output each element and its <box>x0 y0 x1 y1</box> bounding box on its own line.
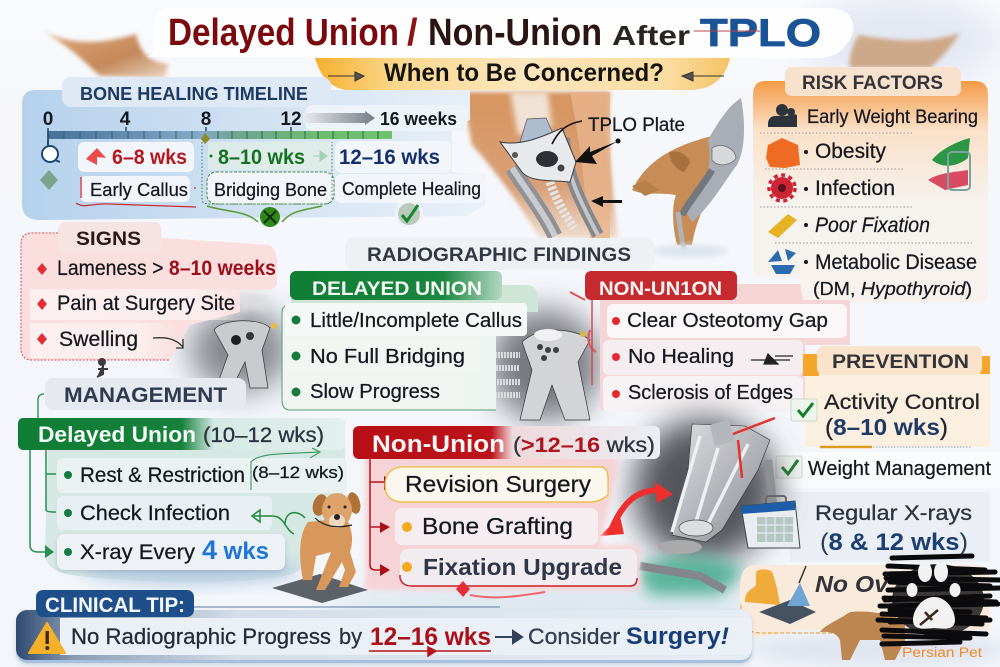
icon: toy figure <box>745 569 780 605</box>
white labels <box>78 141 485 204</box>
title words: Delayed Union <box>168 12 399 54</box>
delayed head text: Delayed Union <box>38 422 196 447</box>
panel: clinical tip: 12–16 wks <box>370 623 491 651</box>
items: Clear Osteotomy Gap <box>627 309 828 332</box>
icon: loupe <box>42 140 60 162</box>
signs heading: SIGNS <box>76 229 141 250</box>
panel: clinical tip <box>16 590 752 663</box>
check activity <box>791 399 817 421</box>
panel: signs: Swelling <box>59 328 138 351</box>
icon: small walking dog <box>820 612 905 660</box>
icon: poor fixation <box>768 214 797 238</box>
panel: clinical tip: Surgery! <box>626 623 729 650</box>
panel: delayed union findings: Slow Progress <box>310 380 440 403</box>
title banner <box>146 8 853 58</box>
title banner: TPLO <box>700 12 821 55</box>
scale numbers <box>43 109 302 130</box>
panel: bone healing timeline: 8–10 wks <box>218 146 305 169</box>
green highlight under 8-10 <box>208 142 332 170</box>
non-union heading: NON-UN1ON <box>599 278 722 300</box>
panel: delayed union findings: No Full Bridging <box>310 345 465 368</box>
panel: non-union findings: No Healing <box>628 345 734 368</box>
green bracket with icon <box>207 206 322 227</box>
timeline heading: BONE HEALING TIMELINE <box>80 84 308 104</box>
icon: calendar briefcase <box>741 496 800 548</box>
x-ray schedule panel: (8 & 12 wks ) <box>820 529 968 556</box>
stage names: Early Callus <box>90 179 188 200</box>
bullets <box>292 316 300 396</box>
panel: non-union management <box>353 426 660 597</box>
panel: no overload beige <box>740 565 990 640</box>
white strip behind 16 weeks <box>305 105 467 131</box>
scribbled watermark paw <box>878 556 1000 644</box>
row: rest: (8–12 wks) <box>252 463 344 482</box>
arrow from dog <box>252 510 305 534</box>
small arrow <box>751 354 793 364</box>
icon: red arrow <box>86 148 106 165</box>
scale numbers: 12 <box>280 109 302 130</box>
icon: weight bearing <box>768 104 797 127</box>
panel: prevention: (8–10 wks ) <box>825 414 948 440</box>
panel: delayed union management <box>18 418 347 584</box>
activity control: Activity Control <box>824 391 980 414</box>
scale numbers: 0 <box>43 109 53 130</box>
pin marker <box>97 358 108 377</box>
row: fixation: Fixation Upgrade <box>423 554 622 580</box>
subtitle text: When to Be Concerned? <box>384 59 664 87</box>
arrow <box>495 631 522 643</box>
green dot and small arrow <box>210 151 327 161</box>
risk heading: RISK FACTORS <box>802 73 943 94</box>
bullet markers <box>37 263 47 345</box>
signs items: Lameness > 8–10 weeks <box>57 257 276 280</box>
ribbon arrows <box>328 72 364 81</box>
row backgrounds <box>30 289 250 320</box>
arrow to plate <box>575 141 618 164</box>
panel: risk factors: Obesity <box>815 140 886 163</box>
title banner: Non-Union <box>428 12 602 54</box>
rows <box>607 304 847 338</box>
16 weeks label: 16 weeks <box>380 109 457 129</box>
red underline arrow <box>369 647 491 656</box>
radiographic findings heading: RADIOGRAPHIC FINDINGS <box>367 245 631 266</box>
row: infection <box>57 496 272 530</box>
row: revision: Revision Surgery <box>405 471 592 497</box>
x-ray schedule panel: Regular X-rays <box>815 502 972 525</box>
row: xray <box>57 534 285 570</box>
progress bar <box>48 127 392 144</box>
panel: management bg <box>38 378 246 418</box>
scale numbers: 8 <box>201 109 211 130</box>
weight management row <box>775 452 1000 488</box>
x-ray schedule panel <box>790 492 990 562</box>
arrow to x-ray <box>153 338 183 348</box>
icon: obesity <box>766 138 800 168</box>
divider <box>820 446 872 448</box>
subtitle ribbon <box>315 58 730 90</box>
x-ray sketch between delayed and non-union <box>488 292 600 420</box>
delayed heading <box>290 271 502 300</box>
panel: risk factors: (DM, Hypothyroid ) <box>813 278 972 299</box>
icon: infection gear <box>769 175 795 201</box>
row: grafting: Bone Grafting <box>422 513 573 539</box>
arrow to 16 weeks <box>303 111 375 125</box>
arrow to screws <box>591 196 622 207</box>
icon: diamond <box>40 170 58 190</box>
row: xray: 4 wks <box>202 535 269 565</box>
panel: prevention <box>791 346 990 447</box>
row: rest <box>57 448 347 493</box>
panel: risk factors: Metabolic Disease <box>815 251 977 274</box>
panel: signs: Pain at Surgery Site <box>57 292 235 315</box>
rows <box>285 303 527 336</box>
side view dog with leg <box>632 98 744 257</box>
panel: bone healing timeline: Bridging Bone <box>214 179 327 200</box>
red gap marks <box>733 418 775 478</box>
panel: non-union management: (>12–16 wks) <box>513 434 655 457</box>
icon: standing dog on mat <box>272 491 368 603</box>
watermark text: Persian Pet <box>902 645 982 660</box>
x-ray sketch between signs and delayed <box>190 296 290 392</box>
tip heading: CLINICAL TIP: <box>45 594 185 617</box>
decorative dog tail top left <box>43 31 168 78</box>
red bracket <box>76 177 196 207</box>
title banner: / <box>407 12 418 54</box>
panel: bone healing timeline: 12–16 wks <box>339 146 440 169</box>
row: revision <box>385 467 608 502</box>
icon: scale device <box>759 566 816 624</box>
truncated text: No Ov <box>815 571 889 597</box>
panel: clinical tip: Consider <box>528 624 620 649</box>
scale numbers: 4 <box>120 109 131 130</box>
bullets <box>612 317 620 398</box>
icon: check circle <box>395 200 423 228</box>
weight management row: Weight Management <box>808 458 991 480</box>
decorative dog tail top right <box>849 33 960 68</box>
radiographic findings heading <box>345 238 654 270</box>
panel: delayed union findings: DELAYED UNION <box>312 278 482 300</box>
row: infection: Check Infection <box>80 502 230 525</box>
row: fixation <box>400 549 637 597</box>
panel: non-union findings <box>585 271 850 412</box>
plate label: TPLO Plate <box>588 115 685 136</box>
panel: bone healing timeline: Complete Healing <box>342 178 481 199</box>
week ranges: 6–8 wks <box>112 146 187 169</box>
icon: organs and leaf <box>928 138 970 190</box>
items: Little/Incomplete Callus <box>310 309 522 332</box>
row: xray: X-ray Every <box>80 541 196 564</box>
panel: risk factors <box>753 67 988 303</box>
panel: risk factors: Infection <box>815 177 895 200</box>
tip text: No Radiographic Progress <box>71 624 331 649</box>
center leg and TPLO plate illustration <box>462 92 685 238</box>
dotted dividers <box>760 133 972 243</box>
panel: delayed union findings <box>282 271 538 410</box>
panel: delayed union management: (10–12 wks) <box>203 424 324 447</box>
panel: clinical tip: by <box>339 624 362 649</box>
curved red arrows <box>600 482 673 536</box>
title banner: After <box>612 20 690 51</box>
panel: non-union findings: Sclerosis of Edges <box>628 381 793 404</box>
large bone illustration <box>600 418 777 595</box>
icon: warning <box>29 623 65 653</box>
management heading: MANAGEMENT <box>64 384 227 407</box>
panel: bone healing timeline <box>22 77 485 228</box>
panel: signs <box>21 222 277 377</box>
risk items: Early Weight Bearing <box>807 107 978 128</box>
panel: risk factors: Poor Fixation <box>815 214 930 237</box>
prevention heading: PREVENTION <box>832 351 969 373</box>
icon: metabolic disease <box>768 249 796 274</box>
row: grafting <box>395 508 598 545</box>
non-union head text: Non-Union <box>372 431 505 458</box>
row: rest: Rest & Restriction <box>80 464 245 487</box>
